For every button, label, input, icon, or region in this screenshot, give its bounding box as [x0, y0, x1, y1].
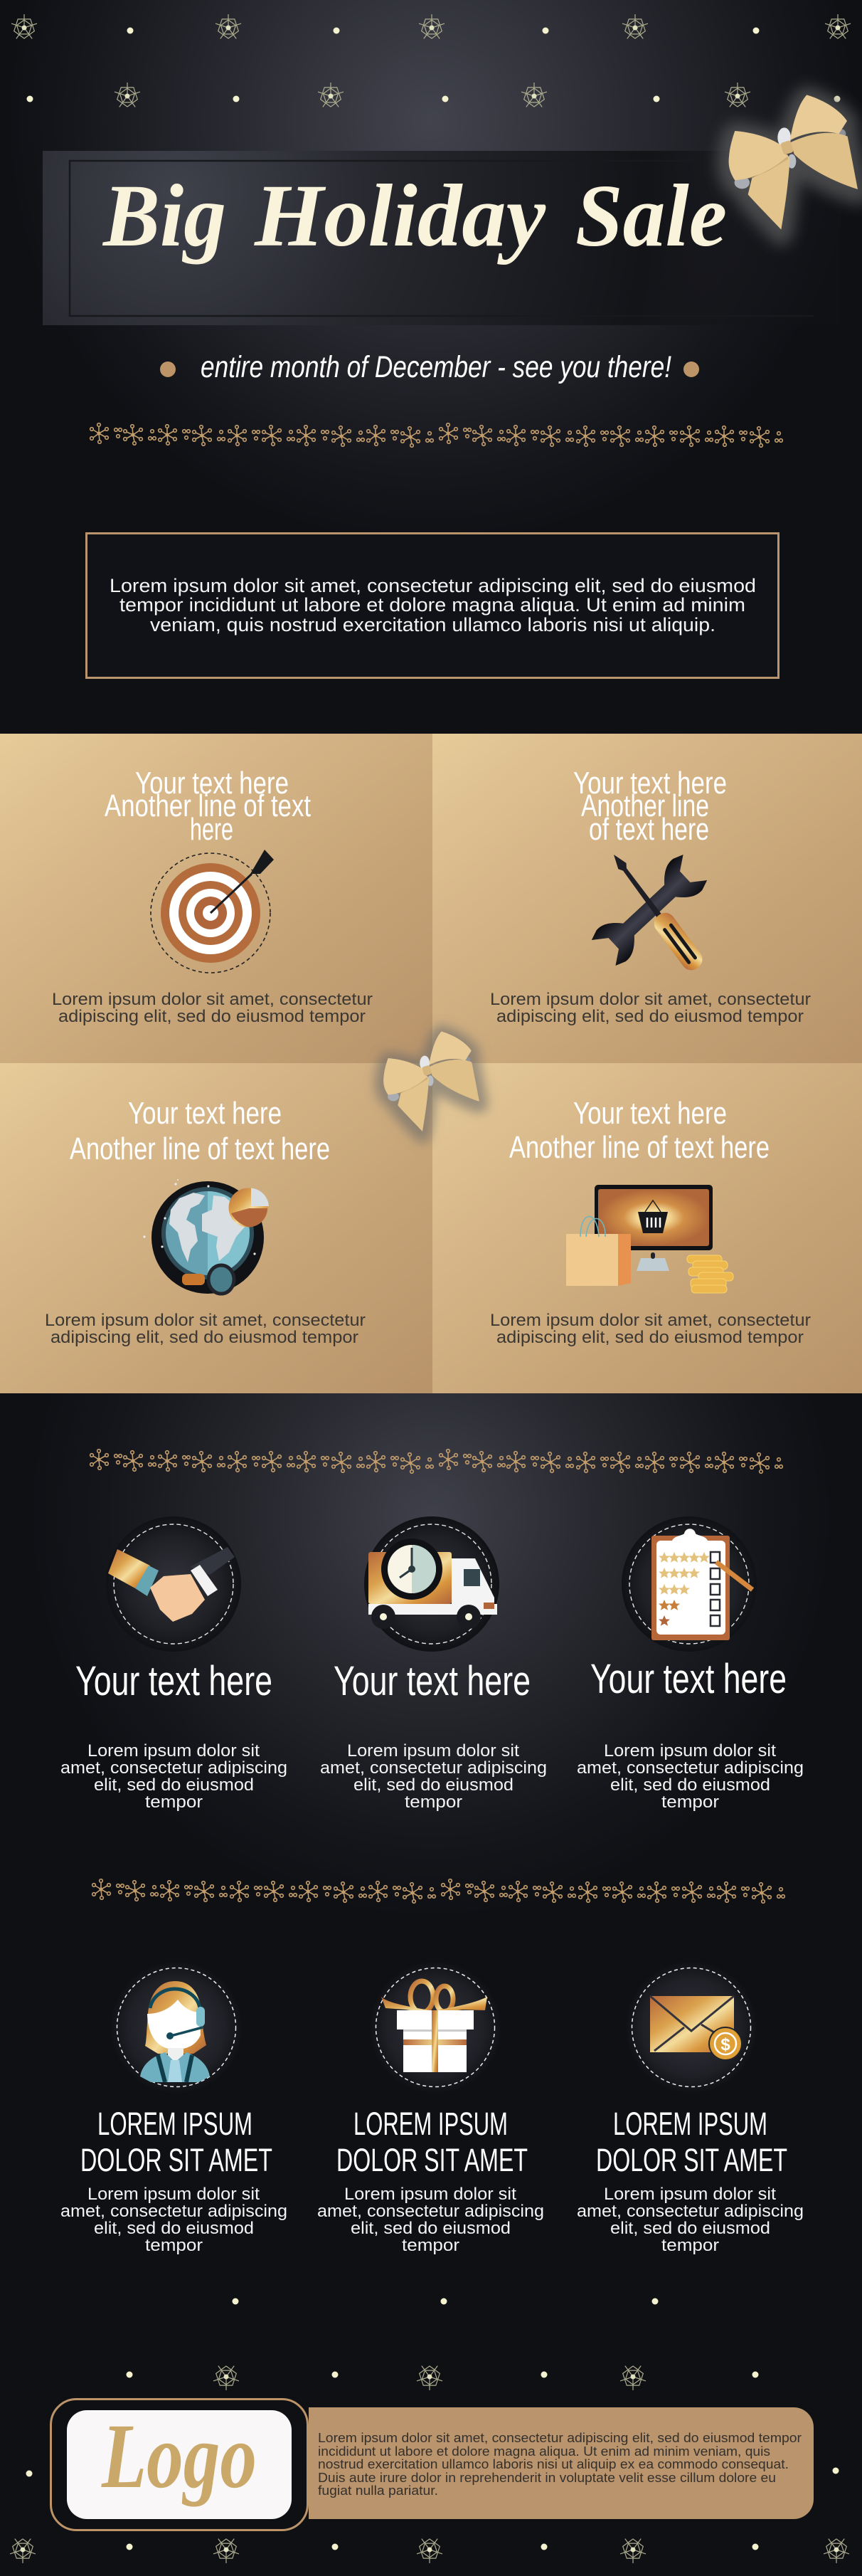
- panel: bottom left: Your text here: [128, 1096, 282, 1131]
- icon: envelope with dollar coin: [626, 1962, 757, 2093]
- intro box: Lorem ipsum dolor sit amet, consectetur adipiscing elit, sed do eiusmod: [110, 575, 756, 596]
- icon: globe with pie chart: [143, 1179, 269, 1294]
- info column: gift: amet, consectetur adipiscing: [317, 2202, 544, 2221]
- feature column: reviews: [577, 1516, 804, 1812]
- info column: mail: DOLOR SIT AMET: [596, 2142, 787, 2178]
- snowflake divider 3: [92, 1879, 784, 1903]
- panel: bottom right: Lorem ipsum dolor sit amet, consectetur: [490, 1311, 811, 1330]
- title: [102, 167, 727, 265]
- info column: support: tempor: [145, 2236, 203, 2255]
- feature column: reviews: tempor: [661, 1793, 719, 1812]
- panel: top left: Another line of text: [105, 788, 311, 823]
- info column: mail: LOREM IPSUM: [613, 2106, 767, 2142]
- subtitle: entire month of December - see you there!: [201, 350, 671, 384]
- intro box: tempor incididunt ut labore et dolore magna aliqua. Ut enim ad minim: [119, 594, 745, 616]
- intro box: [87, 534, 778, 677]
- panel: bottom right: Your text here: [573, 1096, 727, 1131]
- panel: top left: Lorem ipsum dolor sit amet, consectetur: [52, 990, 373, 1009]
- icon: target with arrow: [151, 850, 274, 973]
- panel: top right: Lorem ipsum dolor sit amet, consectetur: [490, 990, 811, 1009]
- panel: top right: Another line: [581, 788, 709, 823]
- info column: support: Lorem ipsum dolor sit: [87, 2185, 260, 2204]
- footer text panel: incididunt ut labore et dolore magna aliqua. Ut enim ad minim veniam, quis: [318, 2444, 770, 2459]
- snowflake divider 2: [90, 1450, 782, 1473]
- info column: support: LOREM IPSUM: [97, 2106, 252, 2142]
- icon: support agent: [111, 1962, 242, 2093]
- info column: support: DOLOR SIT AMET: [80, 2142, 272, 2178]
- feature column: delivery: Your text here: [334, 1658, 531, 1704]
- feature column: handshake: [60, 1516, 287, 1812]
- snowflake divider 1: [90, 423, 782, 447]
- title: Big: [102, 167, 226, 265]
- info column: mail: tempor: [661, 2236, 719, 2255]
- panel: top right: [432, 734, 862, 1063]
- panel: top left: adipiscing elit, sed do eiusmod tempor: [58, 1007, 366, 1026]
- feature column: handshake: elit, sed do eiusmod: [94, 1775, 254, 1795]
- icon: clipboard with star ratings: [622, 1516, 757, 1652]
- top snowflake and dot pattern: [11, 14, 851, 107]
- info column: gift: DOLOR SIT AMET: [336, 2142, 528, 2178]
- feature column: delivery: amet, consectetur adipiscing: [320, 1758, 547, 1778]
- icon: gift box: [370, 1962, 501, 2093]
- info column: gift: tempor: [402, 2236, 459, 2255]
- info column: support: [60, 1962, 287, 2255]
- icon: envelope with dollar coin: $: [720, 2035, 730, 2054]
- panel: top right: Your text here: [573, 766, 727, 801]
- feature column: delivery: tempor: [405, 1793, 462, 1812]
- feature column: reviews: Lorem ipsum dolor sit: [604, 1741, 776, 1761]
- panel: bottom right: Another line of text here: [509, 1130, 770, 1165]
- feature column: delivery: elit, sed do eiusmod: [353, 1775, 514, 1795]
- panel: bottom left: [0, 1063, 432, 1393]
- footer text panel: nostrud exercitation ullamco laboris nisi ut aliquip ex ea commodo consequat.: [318, 2457, 789, 2471]
- title banner: [43, 151, 841, 325]
- feature column: handshake: tempor: [145, 1793, 203, 1812]
- icon: handshake: [106, 1516, 241, 1652]
- ribbon bow: panel centre: [383, 1031, 479, 1134]
- title: Sale: [575, 167, 727, 265]
- panel: top left: [0, 734, 432, 1063]
- info column: mail: amet, consectetur adipiscing: [577, 2202, 804, 2221]
- footer text panel: Duis aute irure dolor in reprehenderit in voluptate velit esse cillum dolore eu: [318, 2471, 776, 2485]
- feature column: reviews: amet, consectetur adipiscing: [577, 1758, 804, 1778]
- info column: mail: [577, 1962, 804, 2255]
- panel: top left: here: [190, 812, 233, 847]
- ribbon bow: banner corner: [729, 95, 858, 233]
- panel: bottom left: Another line of text here: [70, 1131, 330, 1166]
- feature column: handshake: Lorem ipsum dolor sit: [87, 1741, 260, 1761]
- feature column: reviews: Your text here: [590, 1656, 787, 1702]
- feature column: handshake: Your text here: [75, 1658, 272, 1704]
- footer text panel: fugiat nulla pariatur.: [318, 2483, 438, 2498]
- info column: support: amet, consectetur adipiscing: [60, 2202, 287, 2221]
- info column: gift: LOREM IPSUM: [353, 2106, 508, 2142]
- panel: tan grid: [0, 734, 862, 1393]
- icon: wrench and screwdriver: [589, 848, 710, 974]
- logo box: [51, 2400, 307, 2530]
- feature column: delivery: Lorem ipsum dolor sit: [347, 1741, 519, 1761]
- feature column: reviews: elit, sed do eiusmod: [610, 1775, 770, 1795]
- panel: bottom left: Lorem ipsum dolor sit amet, consectetur: [45, 1311, 366, 1330]
- feature column: delivery: [320, 1516, 547, 1812]
- info column: gift: [317, 1962, 544, 2255]
- panel: bottom right: [432, 1063, 862, 1393]
- panel: top right: adipiscing elit, sed do eiusmod tempor: [496, 1007, 804, 1026]
- logo box: Logo: [101, 2405, 257, 2508]
- feature column: handshake: amet, consectetur adipiscing: [60, 1758, 287, 1778]
- info column: gift: elit, sed do eiusmod: [351, 2219, 511, 2238]
- info column: mail: elit, sed do eiusmod: [610, 2219, 770, 2238]
- panel: top right: of text here: [589, 812, 709, 847]
- footer text panel: Lorem ipsum dolor sit amet, consectetur adipiscing elit, sed do eiusmod tempor: [318, 2431, 802, 2445]
- footer text panel: [309, 2407, 814, 2519]
- info column: support: elit, sed do eiusmod: [94, 2219, 254, 2238]
- title: Holiday: [254, 167, 546, 265]
- info column: mail: Lorem ipsum dolor sit: [604, 2185, 776, 2204]
- panel: bottom right: adipiscing elit, sed do eiusmod tempor: [496, 1328, 804, 1347]
- intro box: veniam, quis nostrud exercitation ullamco laboris nisi ut aliquip.: [150, 614, 715, 635]
- icon: online shop monitor, bag and coins: [566, 1185, 733, 1293]
- bottom snowflake and dot pattern: [10, 2298, 849, 2563]
- panel: top left: Your text here: [135, 766, 289, 801]
- panel: bottom left: adipiscing elit, sed do eiusmod tempor: [50, 1328, 358, 1347]
- info column: gift: Lorem ipsum dolor sit: [344, 2185, 516, 2204]
- icon: delivery truck with clock: [364, 1516, 499, 1652]
